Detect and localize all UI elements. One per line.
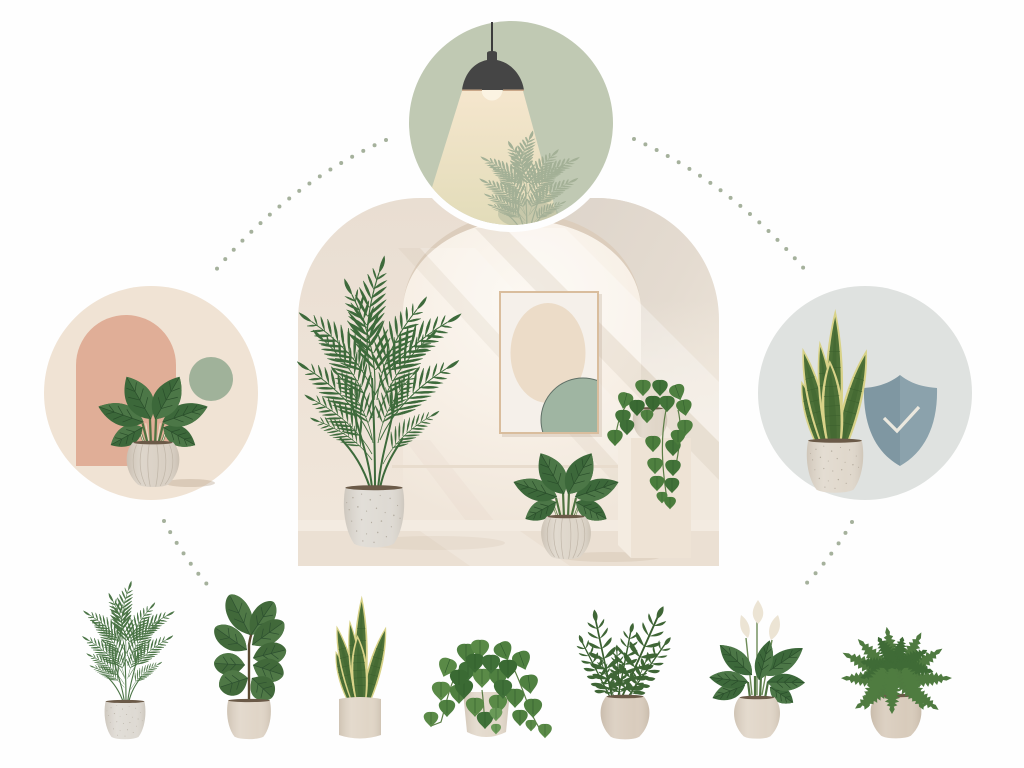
sunlight beams: [475, 228, 719, 480]
pedestal: [618, 438, 691, 558]
light cone: [432, 91, 556, 225]
floor plant in ribbed pot: [510, 447, 622, 559]
plant: boston fern: [839, 625, 952, 738]
dotted connector: top right: [634, 139, 811, 277]
panel: safety circle (right): [758, 286, 972, 500]
inner arch wall: [403, 224, 641, 520]
panel: light circle (top): [409, 21, 613, 232]
plant silhouette: [480, 132, 579, 236]
plant: peace lily: [708, 600, 808, 739]
floor: [641, 531, 719, 566]
dotted connector: lower left: [164, 521, 212, 590]
plant: fiddle leaf fig: [209, 590, 290, 739]
plant: snake plant: [330, 595, 393, 738]
icon: pendant lamp: [462, 22, 524, 100]
pink arch: [76, 315, 176, 466]
tall palm in speckled pot: [297, 256, 461, 547]
white ring: [402, 14, 620, 232]
speckled pot: [807, 438, 863, 493]
plant: areca palm: [82, 581, 174, 739]
panel: central arched room: [297, 198, 719, 566]
dotted connector: top left: [210, 140, 386, 277]
outer wall: [298, 198, 642, 520]
plant row: [82, 581, 952, 739]
plant: trailing pothos: [424, 639, 552, 738]
snake plant: [794, 309, 875, 444]
wall art: [499, 291, 602, 437]
panel: design circle (left): [44, 286, 258, 500]
dotted connector: lower right: [800, 522, 852, 590]
baseboard: [466, 520, 502, 531]
pot shadow: [165, 479, 215, 487]
plant in ribbed pot: [95, 370, 211, 487]
hanging pothos on pedestal: [607, 380, 693, 509]
wainscot rail: [392, 465, 622, 468]
icon: shield with check: [864, 375, 937, 466]
flowers: [740, 600, 780, 640]
arch reveal: [404, 219, 640, 298]
plant: ZZ plant: [569, 599, 680, 739]
green dot: [189, 357, 233, 401]
